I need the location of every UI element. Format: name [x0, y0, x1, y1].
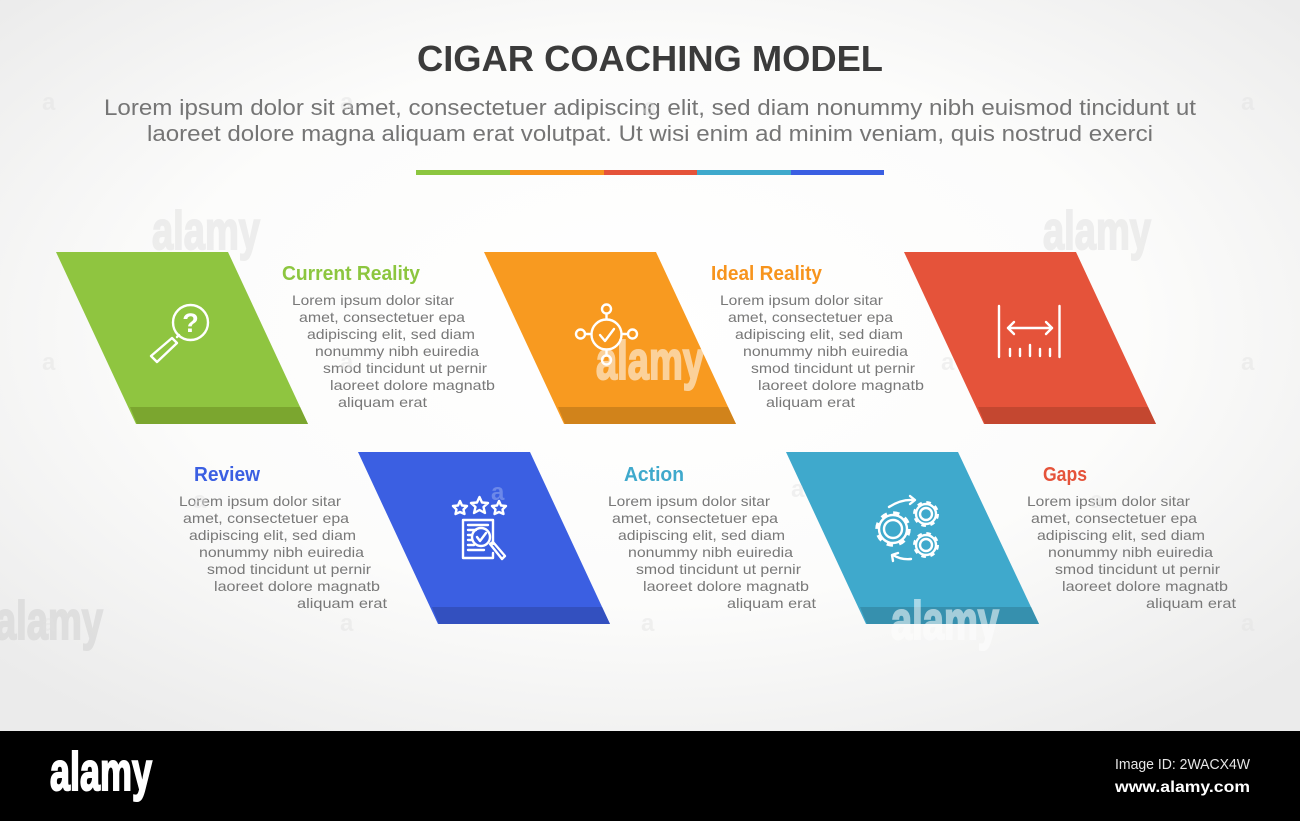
text: current reality: nonummy nibh euiredia: [315, 343, 479, 359]
watermarks: a: [42, 349, 56, 376]
watermarks: a: [491, 479, 505, 506]
subtitle: [104, 95, 1197, 146]
panel: current reality: [56, 252, 308, 424]
heading: ideal reality: Ideal Reality: [711, 263, 823, 285]
text: review: laoreet dolore magnatb: [214, 578, 380, 594]
text: current reality: amet, consectetuer epa: [299, 309, 465, 325]
watermarks: a: [42, 89, 56, 116]
text: review: amet, consectetuer epa: [183, 510, 349, 526]
watermarks: alamy: [152, 201, 260, 261]
watermarks: [0, 89, 1255, 651]
icon: gears: [877, 496, 938, 561]
text: current reality: adipiscing elit, sed diam: [307, 326, 475, 342]
text: ideal reality: nonummy nibh euiredia: [743, 343, 908, 359]
text: review: [179, 493, 387, 611]
text: ideal reality: smod tincidunt ut pernir: [751, 360, 915, 376]
text: current reality: laoreet dolore magnatb: [330, 377, 495, 393]
watermarks: a: [1241, 349, 1255, 376]
text: ideal reality: [720, 292, 924, 410]
icon: rated document: [453, 497, 506, 559]
text: action: aliquam erat: [727, 595, 816, 611]
text: current reality: [292, 292, 495, 410]
text: ideal reality: amet, consectetuer epa: [728, 309, 893, 325]
text: gaps: Lorem ipsum dolor sitar: [1027, 493, 1190, 509]
panel: ideal reality: [484, 252, 736, 424]
footer band: [0, 731, 1300, 821]
panel: action: [786, 452, 1039, 624]
watermarks: a: [340, 349, 354, 376]
heading: action: Action: [624, 464, 684, 486]
footer logo: alamy: [50, 742, 152, 802]
text: review: Lorem ipsum dolor sitar: [179, 493, 341, 509]
watermarks: a: [1090, 487, 1104, 514]
text: review: smod tincidunt ut pernir: [207, 561, 371, 577]
text: ideal reality: laoreet dolore magnatb: [758, 377, 924, 393]
footer image id: Image ID: 2WACX4W: [1115, 756, 1251, 773]
icon: magnifier with question mark: ?: [182, 308, 199, 338]
text: gaps: aliquam erat: [1146, 595, 1236, 611]
icon: hub with check: [576, 304, 637, 364]
watermarks: a: [941, 349, 955, 376]
text: gaps: smod tincidunt ut pernir: [1055, 561, 1220, 577]
watermarks: a: [340, 89, 354, 116]
heading: review: Review: [194, 464, 260, 486]
watermarks: a: [340, 610, 354, 637]
watermarks: a: [643, 94, 657, 121]
watermarks: a: [193, 487, 207, 514]
text: action: [608, 493, 816, 611]
icon: magnifier with question mark: [151, 305, 208, 362]
panel: review: [358, 452, 610, 624]
subtitle: laoreet dolore magna aliquam erat volutpat. Ut wisi enim ad minim veniam, quis nostrud exerci: [147, 121, 1153, 146]
text: gaps: laoreet dolore magnatb: [1062, 578, 1228, 594]
watermarks: alamy: [596, 331, 704, 391]
text: action: Lorem ipsum dolor sitar: [608, 493, 770, 509]
text: review: adipiscing elit, sed diam: [189, 527, 356, 543]
panel: gaps: [904, 252, 1156, 424]
text: review: nonummy nibh euiredia: [199, 544, 364, 560]
colored divider: [416, 170, 884, 175]
watermarks: a: [1241, 610, 1255, 637]
text: review: aliquam erat: [297, 595, 387, 611]
watermarks: a: [1241, 89, 1255, 116]
text: action: amet, consectetuer epa: [612, 510, 778, 526]
heading: gaps: Gaps: [1043, 464, 1087, 486]
text: action: laoreet dolore magnatb: [643, 578, 809, 594]
text: current reality: aliquam erat: [338, 394, 427, 410]
text: ideal reality: aliquam erat: [766, 394, 855, 410]
icon: measuring width: [999, 306, 1060, 357]
footer url: www.alamy.com: [1114, 779, 1250, 796]
subtitle: Lorem ipsum dolor sit amet, consectetuer adipiscing elit, sed diam nonummy nibh euismod tincidunt ut: [104, 95, 1197, 120]
text: gaps: amet, consectetuer epa: [1031, 510, 1197, 526]
watermarks: a: [641, 610, 655, 637]
text: ideal reality: Lorem ipsum dolor sitar: [720, 292, 883, 308]
heading: current reality: Current Reality: [282, 263, 421, 285]
watermarks: a: [42, 610, 56, 637]
text: action: adipiscing elit, sed diam: [618, 527, 785, 543]
text: current reality: smod tincidunt ut pernir: [323, 360, 487, 376]
watermarks: a: [791, 476, 805, 503]
watermarks: alamy: [1043, 201, 1151, 261]
text: current reality: Lorem ipsum dolor sitar: [292, 292, 454, 308]
title: CIGAR COACHING MODEL: [417, 38, 883, 79]
text: gaps: nonummy nibh euiredia: [1048, 544, 1213, 560]
watermarks: alamy: [891, 591, 999, 651]
text: action: smod tincidunt ut pernir: [636, 561, 801, 577]
text: gaps: adipiscing elit, sed diam: [1037, 527, 1205, 543]
text: ideal reality: adipiscing elit, sed diam: [735, 326, 903, 342]
text: action: nonummy nibh euiredia: [628, 544, 793, 560]
text: gaps: [1027, 493, 1236, 611]
